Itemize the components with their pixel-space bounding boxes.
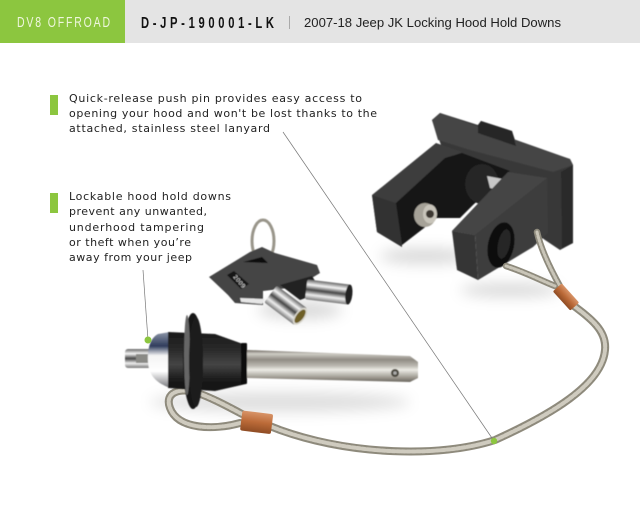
callout: lockable: away from your jeep xyxy=(69,251,192,264)
left arm xyxy=(372,143,462,247)
callout: push pin: Quick-release push pin provides easy access to xyxy=(69,92,362,105)
top tab xyxy=(478,121,516,146)
callout: push pin xyxy=(50,92,377,135)
back plate xyxy=(432,113,573,250)
brand tab xyxy=(0,0,125,43)
chrome head xyxy=(148,332,170,388)
key label xyxy=(227,271,249,290)
upper ferrule xyxy=(553,283,579,311)
flange xyxy=(183,313,203,409)
shadows xyxy=(150,248,560,412)
part number: D-JP-190001-LK xyxy=(141,13,274,31)
callout: push pin: opening your hood and won't be lost thanks to the xyxy=(69,107,377,120)
callout: push pin: attached, stainless steel lanyard xyxy=(69,122,270,135)
callout: lockable: or theft when you’re xyxy=(69,236,191,249)
pin hole xyxy=(484,220,518,270)
callout: lockable: prevent any unwanted, xyxy=(69,205,207,218)
right arm xyxy=(452,172,548,280)
key stems xyxy=(280,276,322,300)
threaded insert xyxy=(414,203,437,227)
lanyard cable xyxy=(169,232,605,451)
leader line: lanyard xyxy=(283,132,497,444)
key ring xyxy=(252,220,274,262)
brand tab: DV8 OFFROAD xyxy=(17,13,110,30)
key label: 2009 xyxy=(231,274,246,290)
push pin xyxy=(125,313,418,409)
keys xyxy=(209,220,354,328)
leader line: lock xyxy=(143,270,152,344)
callout: lockable: Lockable hood hold downs xyxy=(69,190,231,203)
lower ferrule xyxy=(240,410,273,434)
rear key barrel xyxy=(305,279,354,305)
header bar xyxy=(0,0,640,43)
key body xyxy=(209,247,320,305)
callout: lockable: underhood tampering xyxy=(69,221,204,234)
product title: 2007-18 Jeep JK Locking Hood Hold Downs xyxy=(304,16,561,30)
bracket xyxy=(372,113,573,280)
cavity xyxy=(396,153,510,245)
collar xyxy=(168,332,246,391)
front key barrel xyxy=(264,286,310,328)
plunger xyxy=(125,349,154,368)
shaft xyxy=(247,350,418,382)
callout: lockable xyxy=(50,190,231,264)
